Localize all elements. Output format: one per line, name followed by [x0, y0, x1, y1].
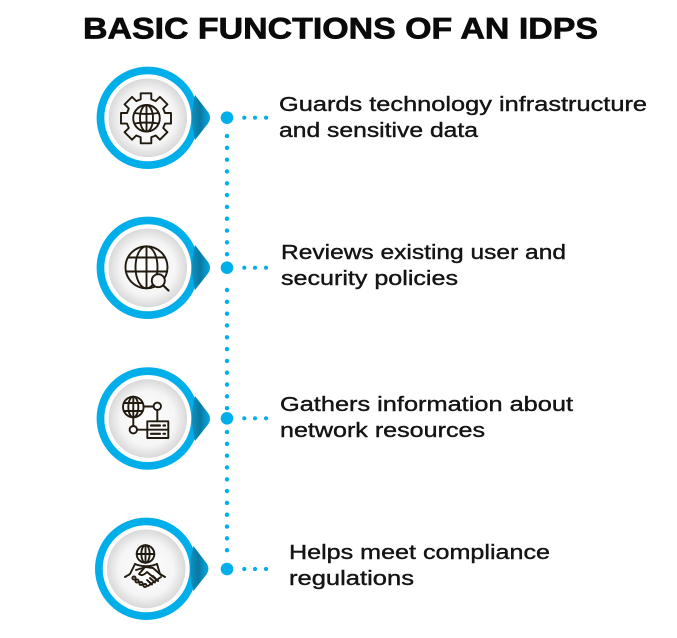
text 4: regulations [289, 567, 414, 590]
ring 4 [99, 521, 194, 616]
ring 2 [100, 220, 195, 315]
connector node 1 [221, 111, 233, 124]
text 1 [279, 93, 647, 142]
pointer 4 [190, 546, 208, 591]
connector node 3 [221, 412, 233, 425]
step 1: guards infrastructure [100, 70, 647, 165]
disc 1 [108, 78, 187, 157]
disc 2 [108, 228, 187, 307]
text 1: and sensitive data [279, 119, 479, 142]
text 2: Reviews existing user and [281, 241, 566, 264]
connector node 4 [221, 563, 233, 575]
icon: globe and handshake [125, 545, 165, 587]
disc 4 [107, 530, 186, 608]
icon: globe with magnifier [126, 246, 168, 290]
horizontal dots 3 [242, 416, 268, 420]
vertical dotted connector [225, 136, 229, 551]
text 3: network resources [280, 419, 485, 442]
horizontal dots 1 [242, 116, 268, 120]
text 1: Guards technology infrastructure [279, 93, 647, 116]
title: BASIC FUNCTIONS OF AN IDPS [83, 12, 598, 46]
text 3: Gathers information about [280, 393, 573, 416]
text 4 [289, 541, 550, 590]
text 3 [280, 393, 573, 442]
step 2: reviews policies [100, 220, 566, 315]
horizontal dots 2 [242, 266, 268, 270]
horizontal dots 4 [242, 567, 268, 571]
text 2 [281, 241, 566, 290]
connector node 2 [221, 261, 233, 274]
text 2: security policies [281, 267, 458, 290]
pointer 3 [192, 396, 210, 441]
text 4: Helps meet compliance [289, 541, 550, 564]
pointer 1 [192, 95, 210, 140]
step 4: compliance [99, 521, 550, 616]
pointer 2 [192, 245, 210, 290]
icon: gear with globe [121, 93, 171, 143]
icon: network with server [123, 397, 168, 438]
step 3: gathers network information [100, 371, 573, 466]
ring 1 [100, 70, 195, 165]
ring 3 [100, 371, 195, 466]
disc 3 [108, 379, 187, 458]
